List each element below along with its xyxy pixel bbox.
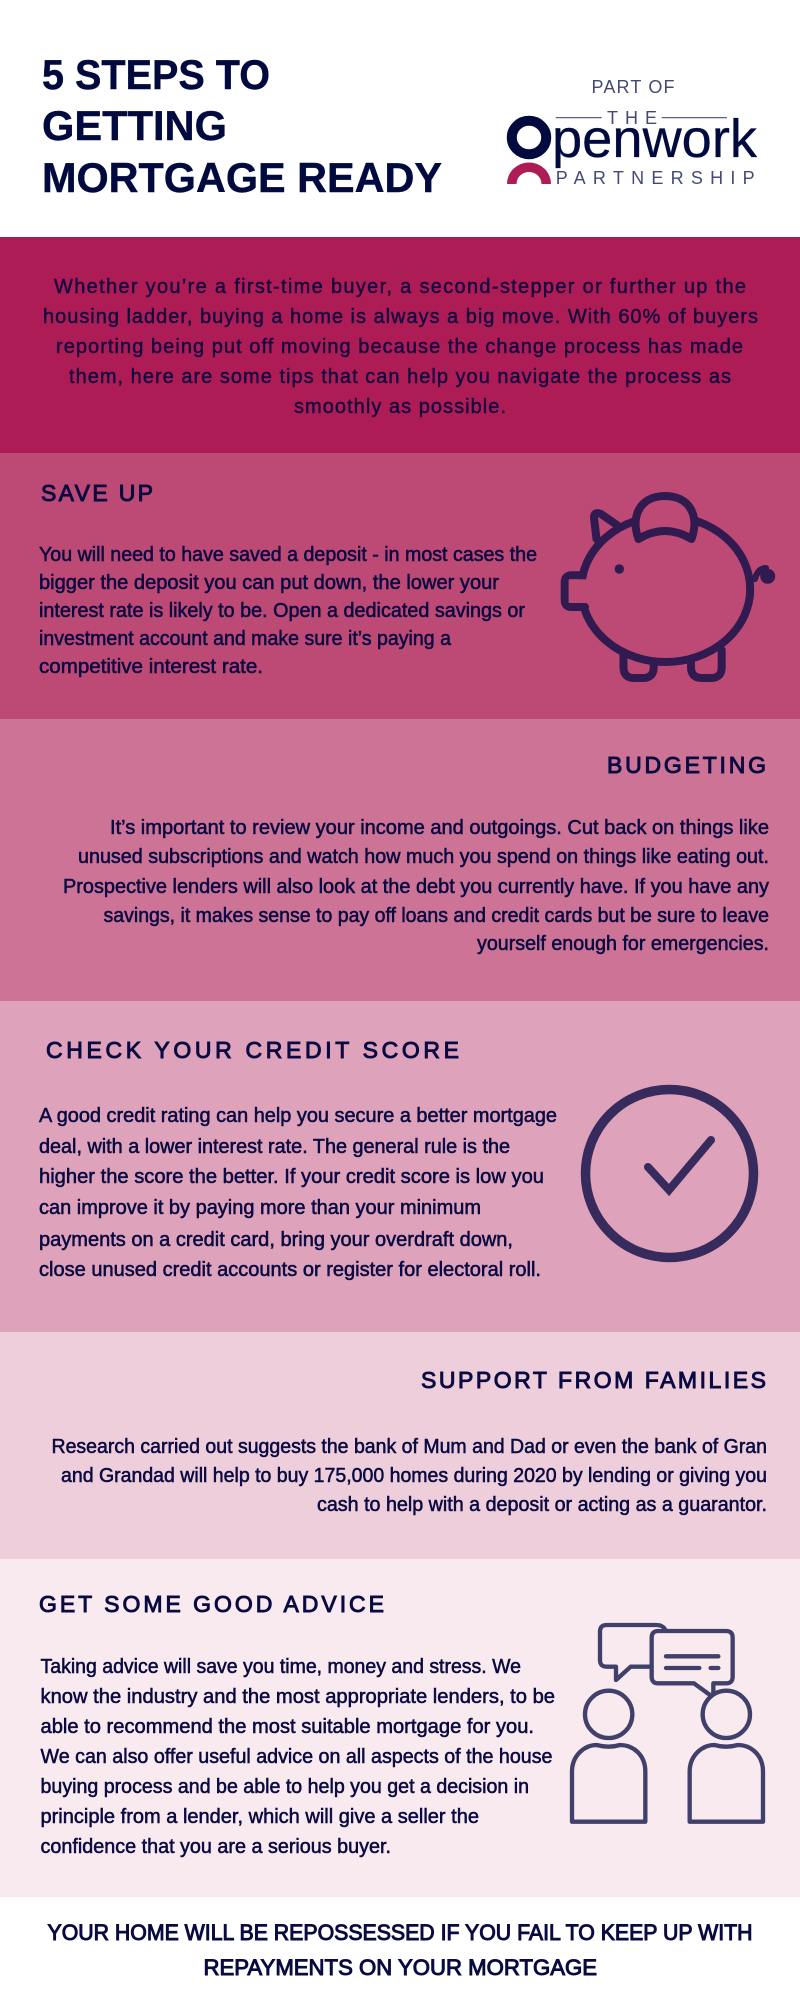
text: credit score <box>39 1104 557 1281</box>
text: budgeting: Prospective lenders will also look at the debt you currently have. If you have any <box>63 875 770 898</box>
intro text: reporting being put off moving because the change process has made <box>56 336 743 358</box>
text: support from families <box>52 1435 767 1516</box>
panel: support from families <box>0 1332 800 1559</box>
text: support from families: cash to help with a deposit or acting as a guarantor. <box>317 1493 767 1516</box>
text: budgeting: unused subscriptions and watch how much you spend on things like eating out. <box>78 845 769 868</box>
intro text: them, here are some tips that can help you navigate the process as <box>69 366 731 388</box>
text: save up <box>39 543 537 678</box>
text: credit score: can improve it by paying more than your minimum <box>39 1196 481 1219</box>
logo: Openwork Partnership: PART OF <box>592 77 674 97</box>
icon: piggy bank <box>565 496 775 678</box>
text: good advice: know the industry and the most appropriate lenders, to be <box>40 1685 555 1708</box>
panel: get some good advice <box>0 1559 800 1897</box>
text: good advice: able to recommend the most suitable mortgage for you. <box>40 1715 534 1738</box>
intro text: housing ladder, buying a home is always a big move. With 60% of buyers <box>43 306 758 328</box>
text: credit score: deal, with a lower interest rate. The general rule is the <box>39 1135 510 1158</box>
text: good advice <box>40 1655 555 1858</box>
text: save up: investment account and make sure it’s paying a <box>39 627 452 650</box>
text: save up: interest rate is likely to be. Open a dedicated savings or <box>39 599 525 622</box>
icon: check mark in circle <box>586 1090 754 1258</box>
text: credit score: higher the score the better. If your credit score is low you <box>39 1165 544 1188</box>
text: budgeting: savings, it makes sense to pay off loans and credit cards but be sure to leave <box>104 904 769 927</box>
text: credit score: payments on a credit card, bring your overdraft down, <box>39 1228 513 1251</box>
logo: Openwork Partnership: penwork <box>552 109 758 169</box>
panel: header <box>0 0 800 237</box>
text: save up: bigger the deposit you can put down, the lower your <box>39 571 499 594</box>
text: support from families: Research carried out suggests the bank of Mum and Dad or even the bank of Gran <box>52 1435 767 1458</box>
text: credit score: A good credit rating can help you secure a better mortgage <box>39 1104 557 1127</box>
logo: Openwork Partnership: THE <box>607 108 657 128</box>
text: credit score: close unused credit accounts or register for electoral roll. <box>39 1258 541 1281</box>
text: budgeting: yourself enough for emergencies. <box>477 932 769 955</box>
panel: check your credit score <box>0 1001 800 1332</box>
panel: budgeting <box>0 719 800 1001</box>
panel: save up <box>0 453 800 719</box>
text: support from families: and Grandad will help to buy 175,000 homes during 2020 by lending or giving you <box>61 1464 767 1487</box>
panel: introduction <box>0 237 800 453</box>
footer warning: YOUR HOME WILL BE REPOSSESSED IF YOU FAIL TO KEEP UP WITH <box>48 1920 752 1945</box>
text: good advice: buying process and be able to help you get a decision in <box>40 1775 529 1798</box>
title: GETTING <box>42 102 227 149</box>
intro text <box>43 276 758 418</box>
text: budgeting <box>63 816 770 955</box>
title: MORTGAGE READY <box>42 154 442 201</box>
text: save up: You will need to have saved a deposit - in most cases the <box>39 543 537 566</box>
intro text: Whether you’re a first-time buyer, a second-stepper or further up the <box>54 276 746 298</box>
text: save up: competitive interest rate. <box>39 655 263 678</box>
text: good advice: principle from a lender, which will give a seller the <box>40 1805 479 1828</box>
heading: credit score: CHECK YOUR CREDIT SCORE <box>46 1037 459 1063</box>
heading: budgeting: BUDGETING <box>607 752 766 778</box>
text: good advice: confidence that you are a serious buyer. <box>40 1835 391 1858</box>
footer warning <box>0 1897 800 2000</box>
footer warning: REPAYMENTS ON YOUR MORTGAGE <box>204 1955 597 1980</box>
title <box>42 51 442 201</box>
intro text: smoothly as possible. <box>294 396 506 418</box>
title: 5 STEPS TO <box>42 51 270 98</box>
heading: good advice: GET SOME GOOD ADVICE <box>39 1591 384 1617</box>
logo: Openwork Partnership <box>507 77 758 188</box>
text: good advice: Taking advice will save you time, money and stress. We <box>40 1655 521 1678</box>
heading: support from families: SUPPORT FROM FAMILIES <box>421 1367 766 1393</box>
heading: save up: SAVE UP <box>41 480 153 506</box>
icon: two people talking <box>572 1625 763 1822</box>
text: good advice: We can also offer useful advice on all aspects of the house <box>40 1745 552 1768</box>
logo: Openwork Partnership: PARTNERSHIP <box>556 168 755 188</box>
text: budgeting: It’s important to review your income and outgoings. Cut back on things like <box>110 816 769 839</box>
